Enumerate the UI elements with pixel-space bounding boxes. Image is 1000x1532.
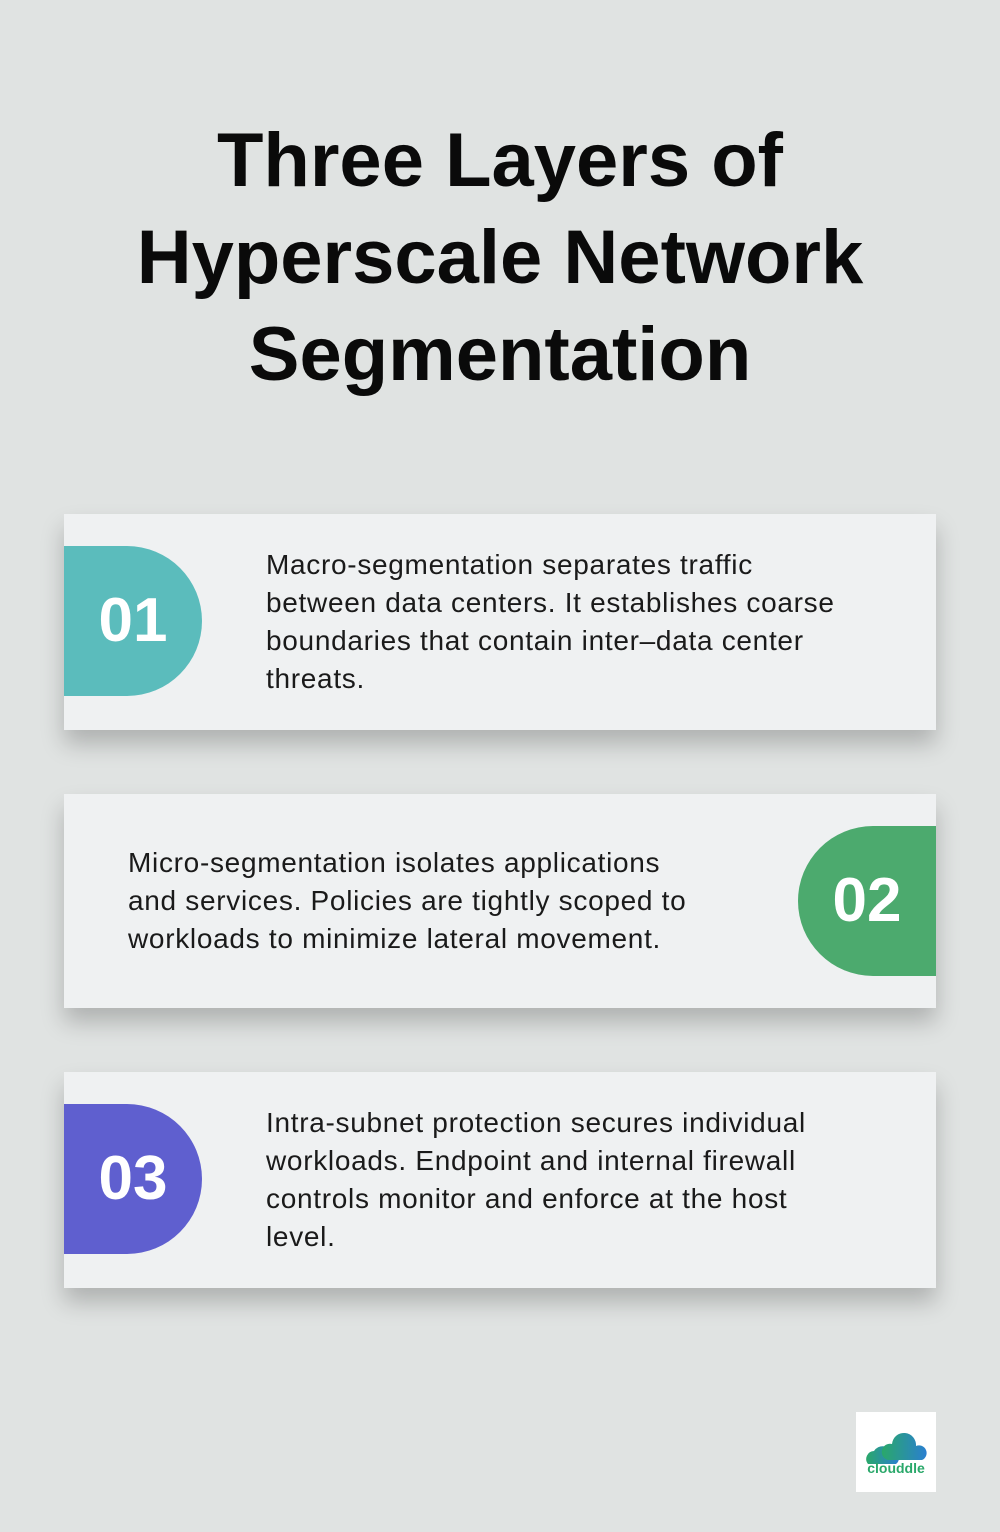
text 01 (266, 549, 835, 694)
panel: step 02 (64, 794, 936, 1008)
title (137, 118, 864, 397)
icon: clouds (866, 1433, 927, 1464)
panel: step 01 (64, 514, 936, 730)
text 03: level. (266, 1221, 336, 1252)
title: Segmentation (249, 312, 751, 397)
text 01: between data centers. It establishes coarse (266, 587, 835, 618)
panel: step 03 (64, 1072, 936, 1288)
text 03: workloads. Endpoint and internal firewall (266, 1145, 796, 1176)
text 02: Micro-segmentation isolates applications (128, 847, 660, 878)
text 02: and services. Policies are tightly scoped to (128, 885, 686, 916)
badge 03 (64, 1104, 202, 1254)
badge 03: 03 (99, 1144, 167, 1213)
logo (856, 1412, 936, 1492)
text 03 (266, 1107, 806, 1252)
text 02: workloads to minimize lateral movement. (128, 923, 661, 954)
text 01: threats. (266, 663, 365, 694)
badge 02 (798, 826, 936, 976)
title: Three Layers of (217, 118, 783, 203)
logo text: clouddle (867, 1460, 925, 1476)
title: Hyperscale Network (137, 215, 863, 300)
badge 02: 02 (833, 866, 901, 935)
text 02 (128, 847, 686, 954)
badge 01: 01 (99, 586, 167, 655)
badge 01 (64, 546, 202, 696)
text 01: Macro-segmentation separates traffic (266, 549, 753, 580)
text 03: controls monitor and enforce at the host (266, 1183, 787, 1214)
text 03: Intra-subnet protection secures individual (266, 1107, 806, 1138)
text 01: boundaries that contain inter–data center (266, 625, 804, 656)
